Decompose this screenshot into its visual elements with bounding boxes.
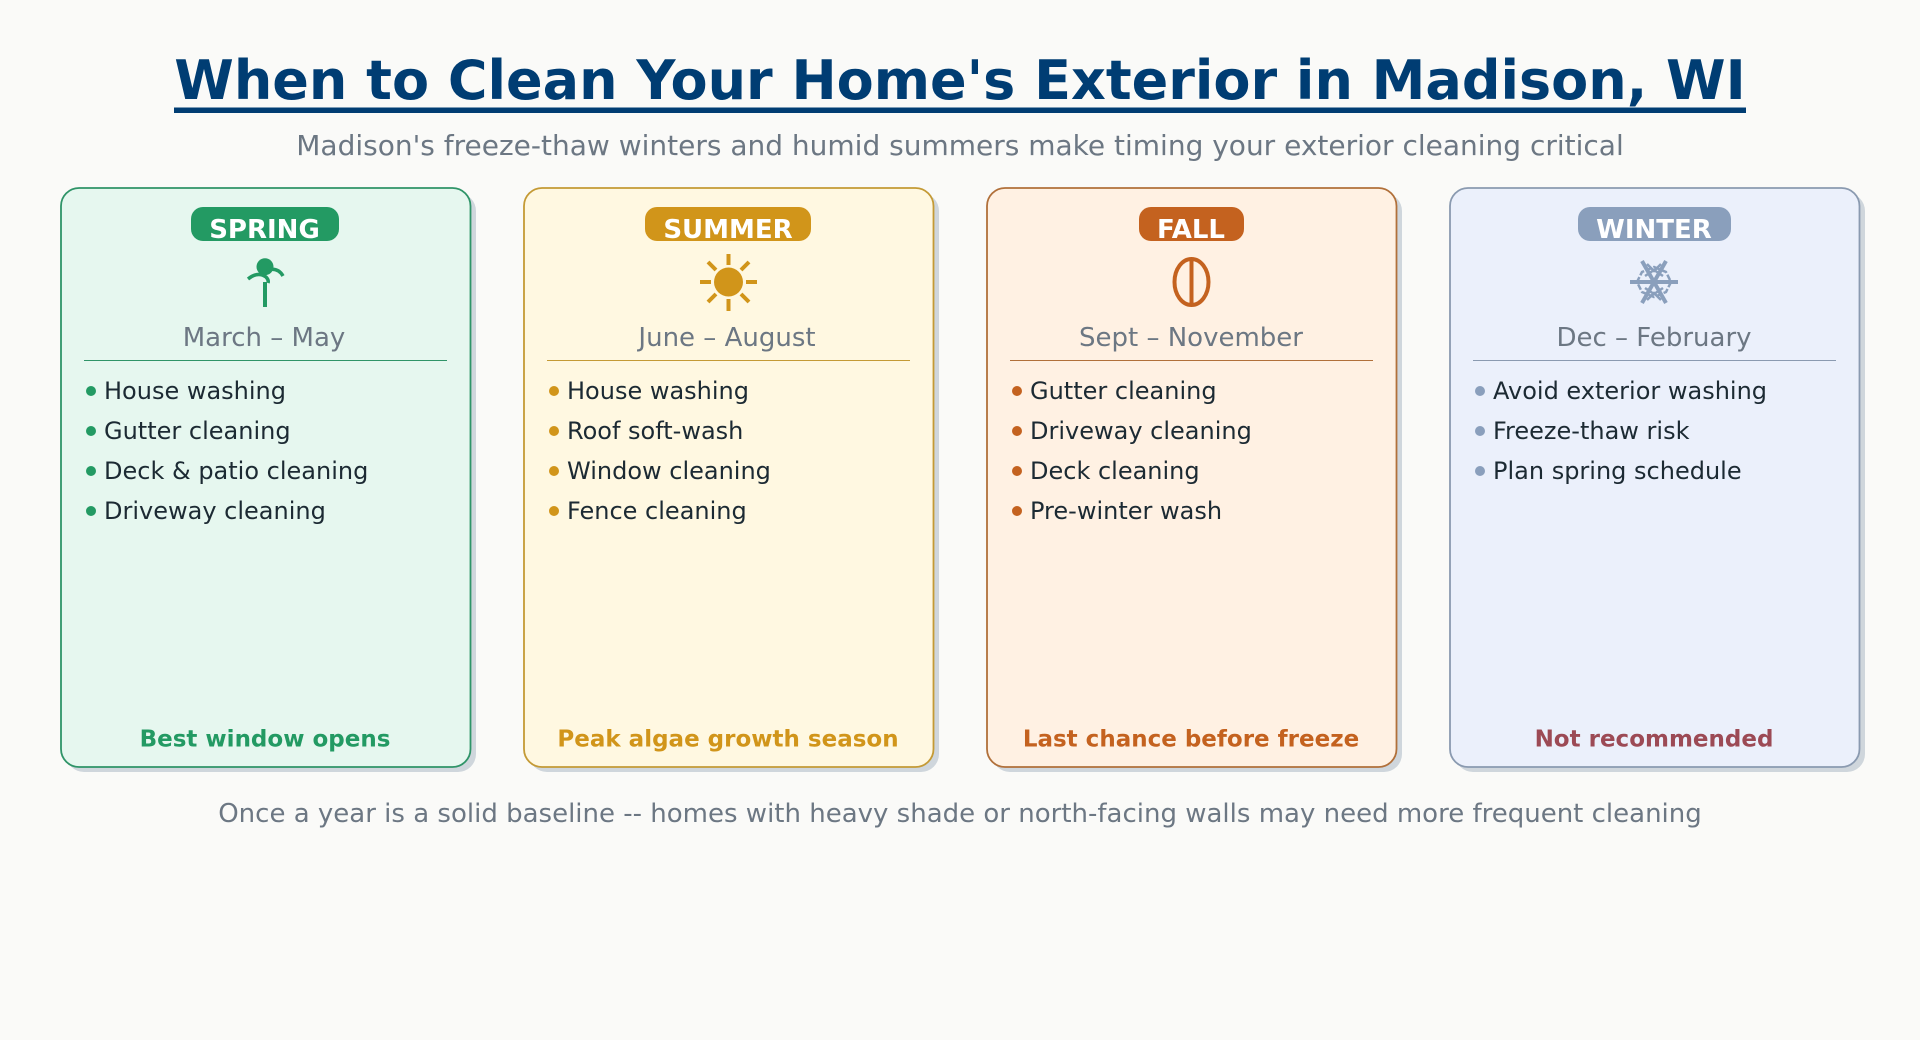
fall list: Pre-winter wash — [1030, 497, 1222, 525]
winter note: Not recommended — [1535, 726, 1773, 752]
spring list: Gutter cleaning — [104, 417, 291, 445]
summer list: Fence cleaning — [567, 497, 747, 525]
spring list: House washing — [104, 377, 286, 405]
summer period: June – August — [636, 323, 816, 353]
summer note: Peak algae growth season — [557, 726, 899, 752]
summer badge — [645, 207, 811, 245]
icon: snowflake — [1630, 261, 1678, 303]
winter list: Plan spring schedule — [1493, 457, 1742, 485]
summer list: Window cleaning — [567, 457, 771, 485]
winter list: Avoid exterior washing — [1493, 377, 1767, 405]
winter list: Freeze-thaw risk — [1493, 417, 1690, 445]
icon: sprout — [248, 258, 283, 307]
fall period: Sept – November — [1079, 323, 1303, 353]
spring note: Best window opens — [140, 726, 390, 752]
summer list: House washing — [567, 377, 749, 405]
winter badge — [1578, 207, 1731, 245]
summer list: Roof soft-wash — [567, 417, 743, 445]
fall badge — [1139, 207, 1244, 245]
winter badge: WINTER — [1596, 215, 1712, 245]
spring list: Driveway cleaning — [104, 497, 326, 525]
fall list: Driveway cleaning — [1030, 417, 1252, 445]
title: When to Clean Your Home's Exterior in Madison, WI — [174, 49, 1746, 112]
panel: fall — [987, 188, 1402, 772]
spring list: Deck & patio cleaning — [104, 457, 368, 485]
spring period: March – May — [183, 323, 345, 353]
fall list — [1012, 377, 1252, 525]
winter period: Dec – February — [1556, 323, 1752, 353]
winter list — [1475, 377, 1767, 485]
summer list — [549, 377, 771, 525]
fall list: Gutter cleaning — [1030, 377, 1217, 405]
panel: winter — [1450, 188, 1865, 772]
panel: summer — [524, 188, 939, 772]
fall note: Last chance before freeze — [1023, 726, 1359, 752]
subtitle: Madison's freeze-thaw winters and humid summers make timing your exterior cleaning critical — [296, 129, 1624, 162]
spring list — [86, 377, 368, 525]
summer badge: SUMMER — [663, 215, 793, 245]
spring badge — [191, 207, 339, 245]
footer note: Once a year is a solid baseline -- homes with heavy shade or north-facing walls may need more frequent cleaning — [218, 799, 1702, 829]
fall list: Deck cleaning — [1030, 457, 1200, 485]
spring badge: SPRING — [209, 215, 320, 245]
fall badge: FALL — [1157, 215, 1225, 245]
icon: sun — [700, 254, 757, 311]
icon: leaf — [1174, 259, 1208, 305]
panel: spring — [61, 188, 476, 772]
